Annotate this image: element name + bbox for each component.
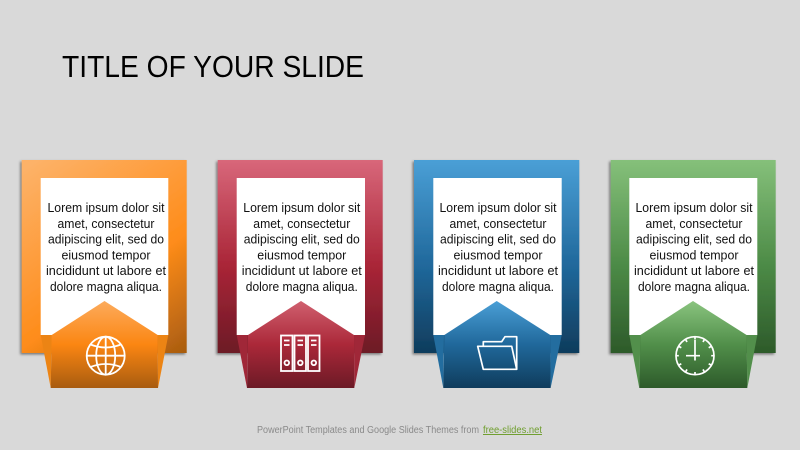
body text xyxy=(438,201,558,294)
right fold xyxy=(158,335,168,388)
pentagon tab xyxy=(51,301,158,388)
left fold xyxy=(629,335,640,388)
panel: green card xyxy=(611,160,776,388)
body text: adipiscing elit, sed do xyxy=(244,233,360,247)
body text: amet, consectetur xyxy=(646,217,742,231)
body text: dolore magna aliqua. xyxy=(442,280,554,294)
pentagon tab xyxy=(443,301,551,388)
body text: eiusmod tempor xyxy=(454,248,542,262)
title: TITLE OF YOUR SLIDE xyxy=(62,50,364,84)
panel: orange card xyxy=(22,160,187,388)
body text: adipiscing elit, sed do xyxy=(440,233,556,247)
card background xyxy=(611,160,776,353)
pentagon tab xyxy=(639,301,747,388)
body text: adipiscing elit, sed do xyxy=(636,233,752,247)
icon: binders xyxy=(281,336,320,371)
body text: eiusmod tempor xyxy=(62,248,150,262)
body text: Lorem ipsum dolor sit xyxy=(636,201,753,215)
panel: blue card xyxy=(414,160,579,388)
body text: Lorem ipsum dolor sit xyxy=(48,201,165,215)
card background xyxy=(218,160,383,353)
icon: clock xyxy=(676,337,714,375)
left fold xyxy=(433,335,444,388)
footer credit: PowerPoint Templates and Google Slides Themes from xyxy=(257,425,479,436)
body text: incididunt ut labore et xyxy=(46,264,166,278)
white text panel xyxy=(41,178,168,335)
body text: amet, consectetur xyxy=(58,217,154,231)
body text: Lorem ipsum dolor sit xyxy=(243,201,361,215)
body text xyxy=(242,201,362,294)
body text: amet, consectetur xyxy=(450,217,546,231)
white text panel xyxy=(433,178,562,335)
body text: incididunt ut labore et xyxy=(242,264,362,278)
right fold xyxy=(747,335,757,388)
body text: eiusmod tempor xyxy=(650,248,738,262)
panel: red card xyxy=(218,160,383,388)
body text: dolore magna aliqua. xyxy=(50,280,162,294)
card background xyxy=(414,160,579,353)
pentagon tab xyxy=(247,301,354,388)
body text xyxy=(46,201,166,294)
body text: incididunt ut labore et xyxy=(438,264,558,278)
left fold xyxy=(237,335,248,388)
body text: adipiscing elit, sed do xyxy=(48,233,164,247)
footer credit: free-slides.net xyxy=(483,425,542,436)
body text: dolore magna aliqua. xyxy=(638,280,750,294)
card background xyxy=(22,160,187,353)
body text: dolore magna aliqua. xyxy=(246,280,358,294)
body text xyxy=(634,201,754,294)
white text panel xyxy=(237,178,365,335)
body text: eiusmod tempor xyxy=(257,248,346,262)
body text: amet, consectetur xyxy=(253,217,350,231)
right fold xyxy=(550,335,562,388)
body text: incididunt ut labore et xyxy=(634,264,754,278)
left fold xyxy=(41,335,52,388)
right fold xyxy=(354,335,365,388)
body text: Lorem ipsum dolor sit xyxy=(440,201,557,215)
icon: folder xyxy=(478,337,517,369)
white text panel xyxy=(629,178,757,335)
icon: globe xyxy=(87,337,125,375)
